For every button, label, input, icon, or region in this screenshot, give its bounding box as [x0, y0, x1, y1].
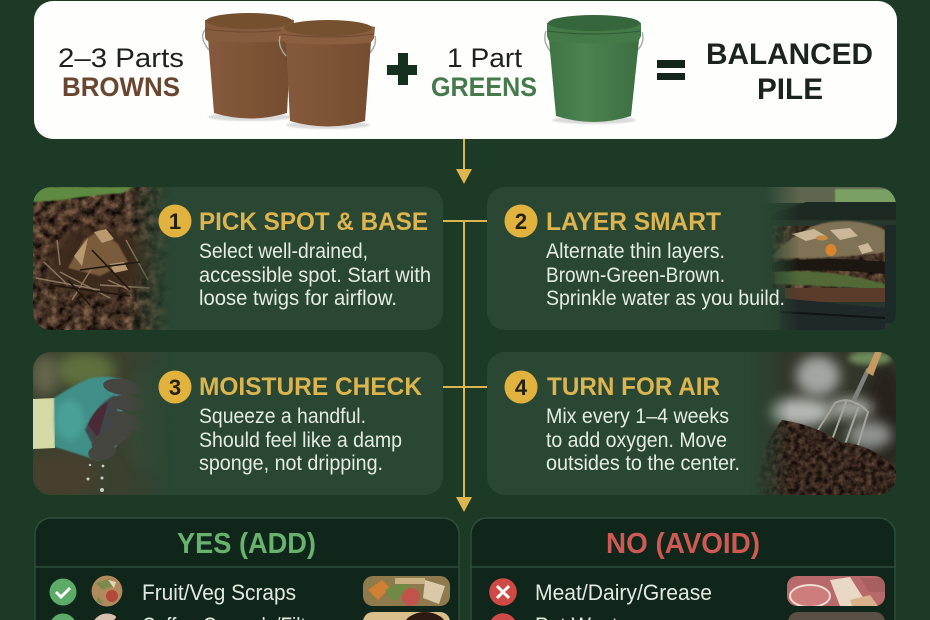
thumbnail: coffee grounds [363, 612, 450, 620]
badge 3: 3 [169, 375, 181, 400]
icon: green bucket [545, 15, 643, 124]
heading: LAYER SMART [546, 208, 721, 236]
body text: sponge, not dripping. [199, 452, 383, 475]
text: 1 part greens: GREENS [431, 72, 537, 102]
heading: no: NO (AVOID) [606, 528, 760, 560]
icon: check 2 [50, 614, 76, 620]
text: 1 part greens [431, 43, 537, 102]
body text [546, 240, 785, 310]
photo: fork turning steaming compost [756, 352, 896, 495]
body text: Select well-drained, [199, 240, 368, 263]
badge 2: 2 [515, 209, 527, 234]
badge 2 [504, 204, 538, 238]
text: 1 part greens: 1 Part [447, 43, 523, 73]
body text [199, 405, 402, 475]
body text: Sprinkle water as you build. [546, 287, 785, 310]
icon: two brown buckets [203, 13, 376, 129]
top panel: ratio equation [34, 1, 897, 139]
icon: plus [387, 53, 417, 85]
badge 4 [504, 370, 538, 404]
body text: accessible spot. Start with [199, 264, 431, 287]
text: balanced pile: BALANCED [706, 38, 873, 71]
badge 1: 1 [169, 209, 181, 234]
body text [546, 405, 740, 475]
icon: cross 1 [489, 578, 517, 606]
body text: Mix every 1–4 weeks [546, 405, 729, 428]
body text: outsides to the center. [546, 452, 740, 475]
text: 2-3 parts browns: 2–3 Parts [58, 43, 184, 73]
heading: MOISTURE CHECK [199, 373, 422, 401]
body text: Brown-Green-Brown. [546, 264, 725, 287]
photo: twig base on soil [33, 187, 173, 330]
heading: yes: YES (ADD) [177, 528, 316, 560]
palm [54, 377, 125, 460]
text: fruit veg scraps: Fruit/Veg Scraps [142, 580, 296, 605]
thumbnail: fruit scraps [363, 576, 450, 606]
cuff [33, 398, 56, 449]
panel: step 3 [20, 352, 443, 499]
icon: equals [657, 60, 685, 80]
body text: loose twigs for airflow. [199, 287, 397, 310]
body text: Squeeze a handful. [199, 405, 366, 428]
body text: Should feel like a damp [199, 429, 402, 452]
text: balanced pile: PILE [757, 73, 823, 106]
body text: to add oxygen. Move [546, 429, 727, 452]
panel: step 4 [487, 351, 905, 495]
panel: step 2 [487, 187, 896, 330]
body text: Alternate thin layers. [546, 240, 725, 263]
badge 3 [158, 370, 192, 404]
badge 4: 4 [515, 375, 528, 400]
badge 1 [158, 204, 192, 238]
thumbnail: meat [787, 576, 885, 607]
text: 2-3 parts browns: BROWNS [62, 72, 180, 102]
panel: no list [471, 518, 895, 620]
panel: step 1 [33, 187, 443, 330]
text: balanced pile [706, 38, 873, 106]
icon: coffee grounds [94, 614, 120, 620]
heading: TURN FOR AIR [547, 373, 720, 401]
icon: fruit scraps [92, 576, 122, 606]
photo: gloved hand squeezing compost [33, 352, 150, 495]
icon: cross 2 [489, 613, 517, 620]
heading: PICK SPOT & BASE [199, 208, 428, 236]
icon: check 1 [50, 578, 76, 606]
thumbnail: pet waste [788, 612, 885, 620]
body text [199, 240, 431, 310]
text: meat dairy grease: Meat/Dairy/Grease [535, 580, 712, 605]
connector arrows [443, 139, 487, 512]
photo: compost bin layers [765, 187, 896, 330]
fingers [87, 376, 145, 462]
panel: yes list [35, 518, 459, 620]
text: 2-3 parts browns [58, 43, 184, 102]
fork [818, 370, 868, 455]
